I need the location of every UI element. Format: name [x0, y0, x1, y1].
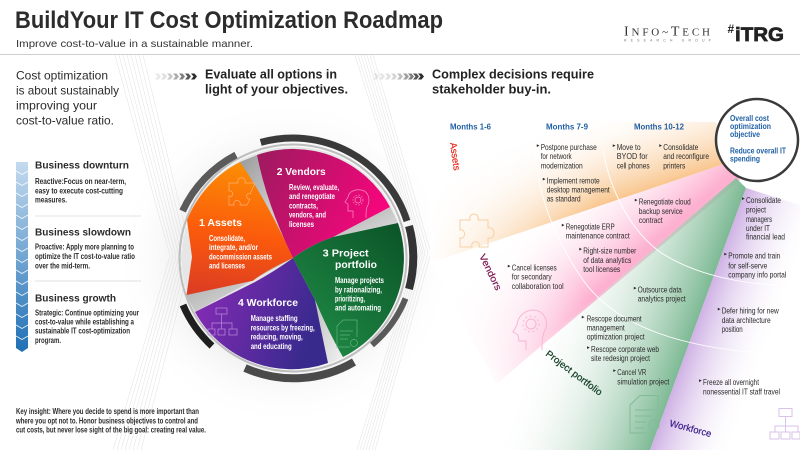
pie text: assets: integrate, and/or [209, 242, 258, 252]
heading: complex decisions: stakeholder buy-in. [432, 82, 551, 96]
roadmap items: workforce: position [722, 324, 743, 334]
roadmap items: workforce: financial lead [746, 232, 785, 242]
roadmap items: workforce: Freeze all overnight [703, 377, 759, 387]
roadmap items: vendors: Renegotiate ERP [566, 221, 615, 231]
roadmap items: workforce: project [746, 205, 766, 215]
intro text: is about sustainably [16, 84, 119, 98]
roadmap items: workforce: ▸ [699, 378, 702, 384]
roadmap items: assets: ▸ [537, 143, 540, 149]
roadmap items: workforce: ▸ [724, 252, 727, 258]
roadmap items: assets: and reconfigure [663, 151, 709, 161]
pie text: workforce: 4 Workforce [238, 297, 298, 309]
roadmap items: assets: for network [541, 151, 572, 161]
pie text: assets: and licenses [209, 261, 245, 271]
wedge 4: workforce [195, 258, 328, 369]
pie text: workforce: and educating [251, 341, 292, 351]
pie text: project portfolio: prioritizing, [335, 294, 365, 304]
roadmap items: project portfolio: ▸ [582, 314, 585, 320]
key insight: cut costs, but never lose sight of the big goal: creating real value. [16, 425, 206, 435]
roadmap items: vendors: backup service [639, 206, 683, 216]
roadmap items: project portfolio: ▸ [634, 285, 637, 291]
icon: descending chevron bar [16, 162, 28, 352]
roadmap items: project portfolio: ▸ [587, 345, 590, 351]
icon: document in project band [630, 396, 659, 433]
roadmap items: workforce: data architecture [722, 315, 771, 325]
roadmap items: vendors: ▸ [508, 263, 511, 269]
roadmap items: assets: BYOD for [617, 151, 648, 161]
text block: business growth: cost-to-value while establishing a [35, 316, 134, 326]
intro text: Cost optimization [16, 68, 108, 82]
text block: business downturn [35, 159, 129, 204]
arrow: complex decisions chevrons [373, 74, 424, 80]
roadmap items: project portfolio: Rescope document [587, 313, 642, 323]
icon: document in pie [337, 320, 358, 347]
heading: evaluate options [205, 68, 348, 96]
text block: business slowdown: optimize the IT cost-to-value ratio [35, 251, 135, 261]
roadmap fan: workforce band [650, 188, 800, 450]
roadmap items: project portfolio: site redesign project [591, 353, 650, 363]
roadmap items: vendors: ▸ [635, 198, 638, 204]
wedge 2: vendors [257, 149, 390, 258]
roadmap items: assets: ▸ [659, 143, 662, 149]
logo: Info-Tech Research Group: I NFO~T ECH [624, 24, 710, 40]
month divider arcs [535, 135, 800, 355]
title: BuildYour IT Cost Optimization Roadmap [15, 7, 443, 34]
pie chart [180, 138, 413, 378]
roadmap items: project portfolio: Outsource data [638, 284, 682, 294]
pie text: workforce: reducing, moving, [251, 332, 303, 342]
band label: assets: Assets [447, 142, 462, 171]
text block: business downturn: measures. [35, 194, 67, 204]
pie text: vendors: licenses [289, 219, 314, 229]
icon: org chart in workforce band [770, 408, 800, 439]
roadmap items: workforce: managers [746, 214, 772, 224]
roadmap items: assets: Postpone purchase [541, 142, 597, 152]
roadmap items: workforce: under IT [746, 223, 771, 233]
key insight: where you opt not to. Honor business objectives to control and [15, 415, 198, 425]
roadmap items: project portfolio: optimization project [587, 332, 645, 342]
month headers: Months 1-6 [450, 122, 491, 132]
pie text: vendors: and renegotiate [289, 191, 335, 201]
roadmap items: project portfolio: Rescope corporate web [591, 344, 659, 354]
icon: puzzle in pie [229, 178, 255, 205]
roadmap items: assets: ▸ [613, 143, 616, 149]
text block: business downturn: Business downturn [35, 159, 129, 171]
intro text [16, 68, 119, 128]
pie rim [180, 138, 413, 378]
logo: Info-Tech Research Group: RESEARCH GROUP [624, 38, 712, 42]
pie shadow [115, 97, 455, 427]
icon: puzzle in assets band [460, 214, 494, 247]
intro text: cost-to-value ratio. [16, 114, 114, 128]
pie text: project portfolio [323, 248, 384, 313]
pie text: workforce: resources by freezing, [251, 322, 315, 332]
roadmap items: assets: cell phones [617, 160, 650, 170]
roadmap items: workforce: for self-serve [728, 260, 767, 270]
background chevron stripes [113, 55, 431, 450]
text block: business slowdown: Business slowdown [35, 227, 131, 239]
logo: #ITRG: iTRG [735, 25, 784, 46]
pie text: project portfolio: Manage projects [335, 275, 384, 285]
arrow: evaluate chevrons [155, 74, 197, 80]
roadmap items: vendors: maintenance contract [566, 230, 630, 240]
circle: overall objective: spending [730, 154, 760, 164]
roadmap items: assets: ▸ [543, 176, 546, 182]
text block: business growth: Strategic: Continue optimizing your [35, 307, 139, 317]
wedge 1: assets [186, 162, 293, 295]
text block: business slowdown [35, 227, 135, 270]
roadmap items: vendors: of data analytics [583, 255, 631, 265]
roadmap items: assets: Consolidate [663, 142, 698, 152]
pie text: vendors [277, 166, 339, 229]
roadmap items: project portfolio [582, 284, 686, 386]
month headers: Months 7-9 [546, 122, 588, 132]
pie text: assets [199, 217, 272, 271]
roadmap items: assets: Implement remote [547, 175, 600, 185]
month headers [450, 122, 684, 132]
roadmap items: vendors: tool licenses [583, 264, 620, 274]
circle: overall objective: optimization [730, 122, 771, 131]
icon: org chart in pie [208, 308, 237, 335]
text block: business growth: program. [35, 335, 61, 345]
roadmap items: workforce [699, 195, 786, 396]
wedge 3: project portfolio [293, 223, 404, 357]
band label: workforce: Workforce [668, 418, 713, 440]
heading: evaluate options: light of your objectives. [205, 82, 348, 96]
heading: complex decisions: Complex decisions require [432, 68, 594, 82]
pie text: workforce [238, 297, 315, 351]
roadmap items: workforce: Defer hiring for new [722, 306, 779, 316]
band label: vendors: Vendors [476, 252, 503, 293]
roadmap items: vendors: Right-size number [583, 246, 636, 256]
roadmap items: project portfolio: Cancel VR [617, 367, 646, 377]
text block: business growth: Business growth [35, 292, 116, 304]
roadmap items: vendors: ▸ [562, 222, 565, 228]
pie text: vendors: contracts, [289, 201, 318, 211]
pie text: project portfolio: portfolio [335, 259, 377, 271]
pie text: project portfolio: and automating [335, 303, 381, 313]
heading: evaluate options: Evaluate all options in [205, 68, 337, 82]
roadmap items: vendors: contract [639, 215, 663, 225]
text block: business downturn: Reactive:Focus on near-term, [35, 176, 126, 186]
roadmap items: vendors: Renegotiate cloud [639, 197, 691, 207]
key insight [15, 406, 206, 435]
circle: overall objective [716, 99, 798, 181]
roadmap items: workforce: Promote and train [728, 251, 780, 261]
pie text: vendors: 2 Vendors [277, 166, 326, 178]
pie text: vendors: Review, evaluate, [289, 182, 339, 192]
text block: business growth: sustainable IT cost-optimization [35, 326, 130, 336]
wedge gaps [240, 155, 293, 258]
roadmap items: project portfolio: management [587, 322, 625, 332]
circle: overall objective: Reduce overall IT [730, 146, 786, 155]
roadmap items: vendors: Cancel licenses [512, 262, 557, 272]
logo: #ITRG: # [728, 22, 734, 36]
roadmap fan: assets band [430, 120, 727, 263]
text block: business growth [35, 292, 139, 345]
pie text: assets: Consolidate, [209, 233, 245, 243]
roadmap items: vendors: ▸ [579, 247, 582, 253]
roadmap items: vendors: collaboration tool [512, 281, 564, 291]
roadmap items: assets [537, 142, 709, 204]
key insight: Key insight: Where you decide to spend is more important than [16, 406, 199, 416]
circle: overall objective: objective [730, 130, 760, 139]
roadmap fan: vendors band [430, 163, 740, 383]
band label: project portfolio: Project portfolio [543, 349, 604, 398]
roadmap items: assets: as standard [547, 194, 581, 204]
intro text: improving your [16, 98, 97, 112]
roadmap items: project portfolio: simulation project [617, 376, 670, 386]
roadmap items: assets: desktop management [547, 185, 610, 195]
pie text: assets: decommission assets [209, 252, 272, 262]
pie text: assets: 1 Assets [199, 217, 242, 229]
pie text: vendors: vendors, and [289, 210, 326, 220]
roadmap items: assets: printers [663, 160, 685, 170]
icon: head in pie [345, 190, 369, 218]
subtitle: Improve cost-to-value in a sustainable manner. [16, 38, 253, 50]
text block: business downturn: easy to execute cost-cutting [35, 185, 123, 195]
roadmap items: workforce: Consolidate [746, 195, 781, 205]
roadmap items: workforce: ▸ [718, 307, 721, 313]
roadmap items: project portfolio: ▸ [613, 368, 616, 374]
roadmap items: assets: Move to [617, 142, 641, 152]
roadmap fan: project portfolio band [440, 178, 746, 450]
month headers: Months 10-12 [634, 122, 684, 132]
roadmap items: assets: modernization [541, 160, 583, 170]
text block: business slowdown: over the mid-term. [35, 260, 90, 270]
roadmap items: vendors: for secondary [512, 272, 552, 282]
pie text: project portfolio: 3 Project [323, 248, 369, 260]
pie text: workforce: Manage staffing [251, 313, 298, 323]
heading: complex decisions [432, 68, 594, 96]
roadmap items: project portfolio: analytics project [638, 293, 686, 303]
pie text: project portfolio: by rationalizing, [335, 284, 382, 294]
circle: overall objective: Overall cost [730, 114, 769, 123]
icon: head in vendors band [513, 310, 546, 350]
roadmap items: workforce: ▸ [742, 196, 745, 202]
text block: business slowdown: Proactive: Apply more planning to [35, 242, 134, 252]
roadmap items: vendors [508, 197, 691, 291]
